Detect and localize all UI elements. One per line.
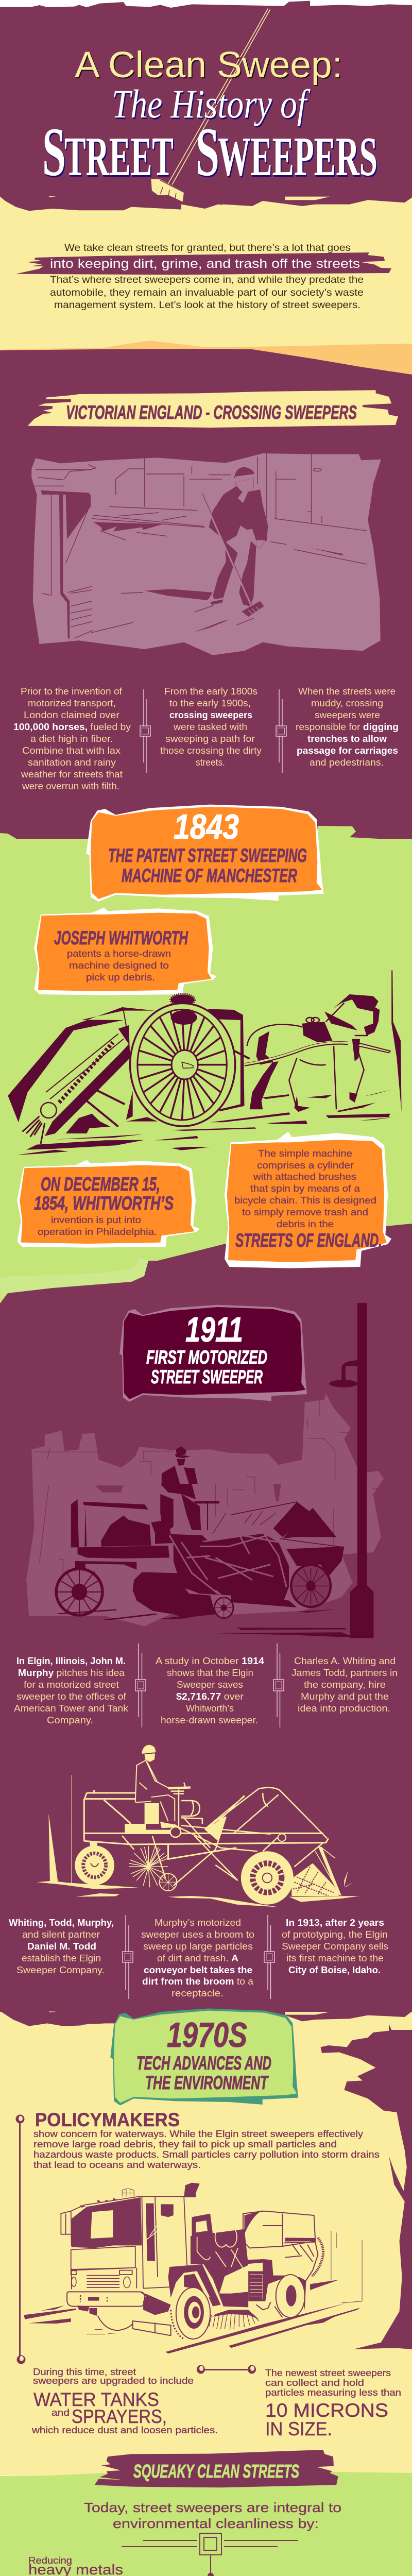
small wheel xyxy=(214,1598,233,1618)
column 2: those crossing the dirty xyxy=(160,745,262,756)
callout: Joseph Whitworth: patents a horse-drawn xyxy=(67,948,171,959)
column 2: receptacle. xyxy=(171,1988,224,1998)
timeline connector xyxy=(15,2114,26,2364)
column 1: Sweeper Company. xyxy=(16,1965,105,1975)
text: water tanks and sprayers: and xyxy=(52,2408,70,2418)
intro text with highlighted brush line xyxy=(16,243,391,311)
road lines xyxy=(24,2309,76,2319)
text: ten microns xyxy=(265,2368,401,2439)
controls xyxy=(168,1786,191,1789)
column 2: sweep up large particles xyxy=(143,1941,253,1952)
column 2: to the early 1900s, xyxy=(169,698,251,708)
column 3: its first machine to the xyxy=(286,1953,384,1963)
column 3 xyxy=(282,1918,388,1975)
column 3 xyxy=(296,686,399,768)
column 2: sweeper uses a broom to xyxy=(141,1929,254,1940)
driver xyxy=(142,1745,158,1754)
callout: 1970s: THE ENVIRONMENT xyxy=(145,2072,269,2093)
title: A Clean Sweep: xyxy=(75,45,342,86)
brush xyxy=(129,1846,168,1887)
text columns: early company xyxy=(9,1918,388,1998)
sweeper figure xyxy=(209,467,268,617)
column 1: sanitation and rainy xyxy=(28,757,116,768)
callout: 1843: MACHINE OF MANCHESTER xyxy=(122,865,297,886)
column 3: Charles A. Whiting and xyxy=(294,1656,396,1666)
post xyxy=(391,970,402,1112)
label: heavy metals xyxy=(28,2555,123,2576)
title: S xyxy=(42,114,66,191)
column 1: American Tower and Tank xyxy=(14,1703,129,1714)
illustration: cream line drawing of early sweeper xyxy=(37,1745,360,1907)
callout: On December 15, 1854: 1854, WHITWORTH’S xyxy=(34,1193,174,1214)
column 1: Whiting, Todd, Murphy, xyxy=(9,1918,114,1928)
column 3: passage for carriages xyxy=(297,745,398,756)
illustration: horse-drawn sweeping machine xyxy=(8,970,402,1155)
callout: 1970s xyxy=(110,2008,298,2106)
intro text with highlighted brush line: automobile, they remain an invaluable part of our society’s waste xyxy=(50,287,364,298)
column 2: Murphy’s motorized xyxy=(154,1918,241,1928)
column 1: weather for streets that xyxy=(21,769,123,779)
column 1 xyxy=(9,1918,114,1975)
text: today: Today, street sweepers are integral to xyxy=(84,2500,341,2515)
driver xyxy=(162,1446,198,1485)
building lines xyxy=(34,453,367,638)
title: S xyxy=(197,115,220,192)
wheel gears xyxy=(171,995,195,1005)
ground shadows xyxy=(17,1090,394,1155)
callout: simple machine: comprises a cylinder xyxy=(257,1160,354,1171)
text: today xyxy=(84,2500,341,2531)
callout: On December 15, 1854 xyxy=(17,1160,200,1248)
illustration: 1911 motorized sweeper scene xyxy=(26,1303,407,1638)
horse xyxy=(247,994,380,1112)
column 2: horse-drawn sweeper. xyxy=(161,1715,258,1725)
illustration: modern street sweeper truck xyxy=(24,2183,362,2353)
rear wheel left xyxy=(56,1569,102,1615)
column 3: and pedestrians. xyxy=(310,757,384,768)
city silhouette xyxy=(26,1394,384,1626)
column 3 xyxy=(291,1656,398,1714)
column 1: In Elgin, Illinois, John M. xyxy=(16,1656,126,1666)
column 3: the company, hire xyxy=(304,1680,386,1690)
callout: simple machine: to simply remove trash and xyxy=(242,1207,368,1217)
callout: 1911: 1911 xyxy=(185,1310,243,1349)
column 1: a diet high in fiber. xyxy=(30,734,113,744)
exhaust, roof xyxy=(184,2183,200,2197)
callout: 1970s: TECH ADVANCES AND xyxy=(136,2053,271,2074)
column 3: Murphy and put the xyxy=(301,1691,389,1702)
callout: On December 15, 1854: invention is put into xyxy=(51,1215,141,1225)
column 3: responsible for digging xyxy=(296,722,399,732)
icon: broom across title xyxy=(151,9,270,202)
front panel xyxy=(71,2246,179,2289)
callout: 1843 xyxy=(86,805,324,902)
heading banner: Squeaky clean streets xyxy=(95,2450,338,2487)
cart body xyxy=(208,1009,244,1111)
wheel xyxy=(130,1003,235,1126)
text columns: Victorian xyxy=(13,686,399,791)
column 1: Daniel M. Todd xyxy=(27,1941,96,1952)
text: water tanks and sprayers xyxy=(31,2367,218,2435)
callout: simple machine: bicycle chain. This is designed xyxy=(234,1195,376,1206)
column 1: motorized transport, xyxy=(28,698,116,708)
column 1: for a motorized street xyxy=(24,1680,119,1690)
column 2: From the early 1800s xyxy=(164,686,258,697)
text: ten microns: The newest street sweepers xyxy=(265,2368,391,2378)
intro text with highlighted brush line: management system. Let’s look at the history of street sweepers. xyxy=(54,300,360,311)
purple brush edge over cream section xyxy=(0,2004,412,2026)
text: policymakers xyxy=(33,2109,380,2170)
brush drum xyxy=(133,1572,215,1618)
ornament divider xyxy=(122,2533,298,2576)
callout: simple machine: debris in the xyxy=(277,1219,334,1229)
callout: Joseph Whitworth: machine designed to xyxy=(69,960,169,971)
title: S xyxy=(43,115,67,192)
small front wheel xyxy=(160,1874,177,1891)
text: policymakers: show concern for waterways. While the Elgin street sweepers effectively xyxy=(33,2129,363,2139)
column 1: establish the Elgin xyxy=(22,1953,101,1963)
hood xyxy=(71,1499,79,1547)
title: The History of xyxy=(113,83,312,128)
hood and chassis xyxy=(84,1790,329,1859)
heading banner: Squeaky clean streets: SQUEAKY CLEAN STREETS xyxy=(133,2461,299,2482)
callout: On December 15, 1854: operation in Philadelphia. xyxy=(38,1227,157,1237)
column 3: sweepers were xyxy=(315,710,380,720)
text: water tanks and sprayers: During this time, street xyxy=(33,2367,136,2377)
post and ground xyxy=(48,1814,58,1882)
illustration: Elgin sweeper vehicle xyxy=(56,1484,355,1637)
ground shadows xyxy=(57,1609,117,1614)
title: S xyxy=(196,114,219,191)
text: water tanks and sprayers: SPRAYERS, xyxy=(72,2406,167,2427)
column 2: streets. xyxy=(196,757,225,768)
engine bay xyxy=(191,2229,248,2307)
hopper xyxy=(8,1007,155,1122)
column 3: When the streets were xyxy=(298,686,396,697)
column 1: were overrun with filth. xyxy=(22,781,119,791)
debris pile and chute xyxy=(291,1863,339,1896)
column 3: Sweeper Company sells xyxy=(282,1941,388,1952)
title xyxy=(42,45,379,192)
lamp post xyxy=(329,1303,374,1638)
callout: 1843: THE PATENT STREET SWEEPING xyxy=(108,845,307,866)
driver legs xyxy=(160,1494,174,1534)
callout: Joseph Whitworth xyxy=(34,908,217,995)
side brush housing xyxy=(250,2275,263,2299)
intro text with highlighted brush line: into keeping dirt, grime, and trash off the streets xyxy=(50,257,360,271)
column 1: Company. xyxy=(47,1715,93,1725)
column 3: muddy, crossing xyxy=(311,698,383,708)
rear body xyxy=(243,2211,315,2248)
text: ten microns: 10 MICRONS xyxy=(265,2400,388,2421)
column 2: of dirt and trash. A xyxy=(157,1953,238,1963)
column 2: A study in October 1914 xyxy=(156,1656,264,1666)
callout: Joseph Whitworth: JOSEPH WHITWORTH xyxy=(54,927,188,948)
title: A Clean Sweep: xyxy=(76,46,344,87)
column 2 xyxy=(160,686,262,768)
callout: 1911: FIRST MOTORIZED xyxy=(146,1347,267,1368)
callout: 1843: 1843 xyxy=(174,807,239,846)
text columns: 1911 xyxy=(14,1656,398,1725)
column 2: Sweeper saves xyxy=(177,1680,243,1690)
central mechanism xyxy=(174,1534,289,1601)
callout: On December 15, 1854: ON DECEMBER 15, xyxy=(41,1174,160,1195)
dark shadows xyxy=(41,490,89,495)
rear wheel xyxy=(276,2275,305,2317)
illustration: Victorian crossing sweeper xyxy=(31,453,381,655)
text: ten microns: particles measuring less than xyxy=(265,2387,401,2398)
front wheel xyxy=(168,2264,221,2307)
column 1: sweeper to the offices of xyxy=(16,1691,127,1702)
big wheel xyxy=(241,1851,294,1905)
road brush xyxy=(213,2310,259,2319)
text: water tanks and sprayers: WATER TANKS xyxy=(33,2389,159,2410)
column 2: shows that the Elgin xyxy=(167,1668,253,1678)
text: water tanks and sprayers: sweepers are upgraded to include xyxy=(33,2376,194,2386)
column 2: dirt from the broom to a xyxy=(142,1976,254,1987)
column 1: London claimed over xyxy=(24,710,119,720)
column 2: conveyor belt takes the xyxy=(144,1965,252,1975)
text: today: environmental cleanliness by: xyxy=(113,2516,319,2531)
panel background xyxy=(31,453,381,655)
intro text with highlighted brush line: That’s where street sweepers come in, and while they predate the xyxy=(50,275,364,285)
text: ten microns: can collect and hold xyxy=(265,2378,364,2388)
green section background xyxy=(0,2472,412,2576)
label: heavy metals: Reducing xyxy=(28,2555,72,2566)
callout: simple machine: that spin by means of a xyxy=(250,1183,360,1194)
heading banner: Victorian England xyxy=(28,390,398,428)
column 3: idea into production. xyxy=(298,1703,390,1714)
dumbbell connector xyxy=(197,2365,256,2374)
title: TREET xyxy=(65,128,175,189)
column 3: James Todd, partners in xyxy=(291,1668,398,1678)
column 1 xyxy=(13,686,131,791)
callout: 1911: STREET SWEEPER xyxy=(151,1366,263,1387)
text: policymakers: that lead to oceans and waterways. xyxy=(33,2160,201,2170)
column 2: $2,716.77 over xyxy=(176,1691,244,1702)
callout: simple machine: The simple machine xyxy=(258,1148,352,1159)
column 1: and silent partner xyxy=(22,1929,100,1940)
column 1: Combine that with lax xyxy=(22,745,121,756)
column 3: In 1913, after 2 years xyxy=(286,1918,384,1928)
column 1 xyxy=(14,1656,129,1725)
callout: Joseph Whitworth: pick up debris. xyxy=(86,972,155,982)
small rear wheel xyxy=(75,1845,114,1885)
column 1: 100,000 horses, fueled by xyxy=(13,722,131,732)
bumper xyxy=(67,2292,145,2307)
intro text with highlighted brush line: We take clean streets for granted, but there’s a lot that goes xyxy=(64,243,351,253)
text: water tanks and sprayers: which reduce dust and loosen particles. xyxy=(31,2425,218,2435)
column 2: sweeping a path for xyxy=(165,734,255,744)
column 1: Prior to the invention of xyxy=(21,686,123,697)
column 2: were tasked with xyxy=(173,722,247,732)
column 3: trenches to allow xyxy=(307,734,387,744)
text: policymakers: POLICYMAKERS xyxy=(35,2109,180,2130)
callout: 1970s: 1970S xyxy=(167,2015,247,2055)
title: TREET xyxy=(64,126,174,188)
column 3: City of Boise, Idaho. xyxy=(288,1965,381,1975)
text: policymakers: hazardous waste products. Small particles carry pollution into storm drains xyxy=(33,2149,380,2160)
front wheel xyxy=(291,1565,331,1607)
column 2 xyxy=(141,1918,254,1998)
column 1: Murphy pitches his idea xyxy=(18,1668,125,1678)
windshield xyxy=(72,2197,142,2248)
column 2: crossing sweepers xyxy=(169,710,252,720)
column 2 xyxy=(156,1656,264,1725)
callout: 1911 xyxy=(119,1305,307,1402)
callout: simple machine xyxy=(225,1132,391,1268)
title: The History of xyxy=(112,81,311,126)
column 2: Whitworth’s xyxy=(186,1703,234,1714)
hero brush stroke xyxy=(0,1,412,211)
callout: simple machine: with attached brushes xyxy=(253,1172,356,1182)
column 3: of prototyping, the Elgin xyxy=(282,1929,388,1940)
text: ten microns: IN SIZE. xyxy=(265,2418,332,2439)
text: policymakers: remove large road debris, they fail to pick up small particles and xyxy=(33,2139,337,2149)
illustration: tree silhouette xyxy=(320,2024,412,2349)
